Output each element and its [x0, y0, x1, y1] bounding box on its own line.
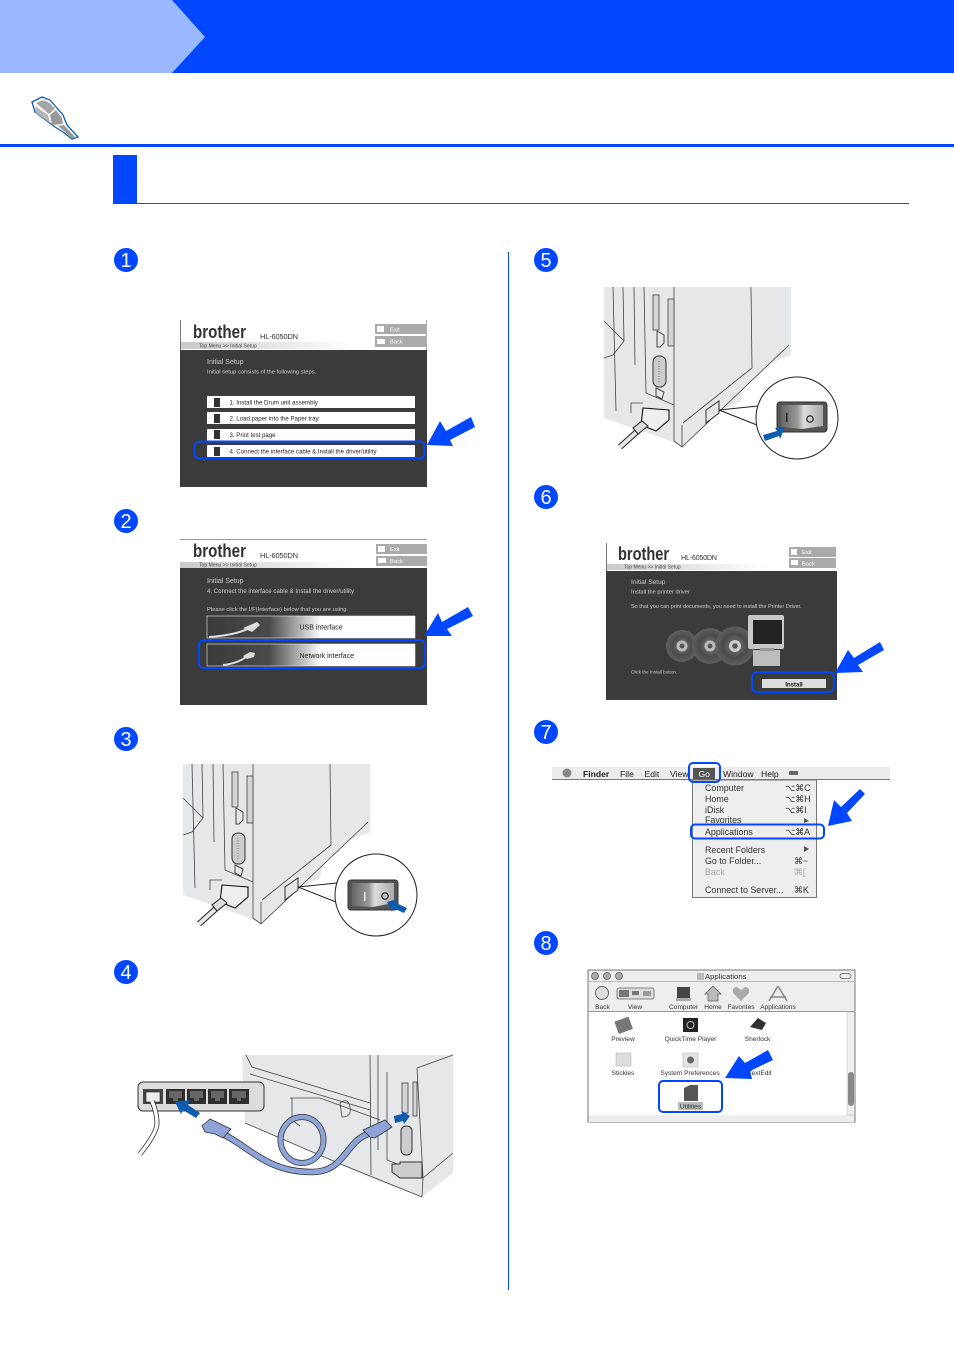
hub input cable	[140, 1101, 157, 1154]
step 7 number: 7	[540, 722, 552, 744]
dropdown menu	[692, 780, 816, 898]
rocker switch	[777, 402, 827, 432]
screenshot: interface selection: Top Menu >> Initial Setup	[199, 562, 257, 568]
step 1 number: 1	[120, 250, 132, 272]
dropdown menu: ⌥⌘A	[785, 827, 810, 837]
step 7 number	[534, 720, 558, 744]
menu bar text	[562, 768, 798, 780]
computer	[748, 615, 784, 666]
switch callout circle	[335, 854, 417, 936]
CD discs	[666, 626, 754, 666]
screenshot: interface selection: Please click the I/F(Interface) below that you are using.	[207, 607, 349, 613]
toolbar: Applications	[760, 1004, 796, 1011]
toolbar	[595, 986, 796, 1011]
file labels	[611, 1036, 772, 1110]
screenshot: install printer driver: Click the Install button.	[631, 670, 677, 674]
illustration: network cable connected to hub and printer	[138, 1055, 453, 1197]
screenshot: interface selection: Exit	[390, 547, 400, 553]
option: Network interface	[207, 644, 415, 666]
screenshot: interface selection: Back	[390, 559, 403, 565]
arrow: step 2	[424, 607, 473, 636]
highlight: install	[752, 672, 834, 692]
dropdown menu: ⌥⌘C	[785, 783, 811, 793]
dropdown menu: ⌥⌘I	[785, 805, 807, 815]
file labels: QuickTime Player	[665, 1036, 717, 1043]
screenshot: initial setup steps: brother	[193, 322, 246, 342]
dropdown menu: ⌘~	[794, 856, 808, 866]
screenshot: install printer driver: Back	[802, 562, 815, 568]
screenshot: install printer driver: Initial Setup	[631, 579, 666, 586]
screenshot: initial setup steps: Exit	[390, 328, 400, 334]
screenshot: install printer driver: HL-6050DN	[681, 553, 717, 562]
menu bar text: Window	[723, 769, 754, 779]
option: USB interface	[207, 616, 415, 638]
install button: Install	[785, 682, 803, 688]
screenshot: install printer driver: brother	[618, 544, 669, 564]
dropdown menu: Go to Folder...	[705, 856, 761, 866]
screenshot: initial setup steps	[180, 320, 427, 487]
dropdown menu: Applications	[705, 827, 753, 837]
hub	[138, 1082, 264, 1111]
network cable	[202, 1117, 392, 1172]
header banner	[0, 0, 954, 73]
menu bar text: Go	[698, 769, 710, 779]
screenshot: Applications window	[588, 970, 855, 1122]
screenshot: install printer driver: Install the printer driver	[631, 590, 690, 596]
screenshot: install printer driver: Exit	[802, 550, 812, 556]
dropdown menu: ⌥⌘H	[785, 794, 811, 804]
toolbar: Back	[595, 1004, 611, 1011]
step 6 number: 6	[540, 487, 552, 509]
step 2 number: 2	[120, 511, 132, 533]
dropdown menu: Back	[705, 867, 725, 877]
step rows: 3. Print test page	[230, 432, 276, 439]
screenshot: initial setup steps: Top Menu >> Initial Setup	[199, 344, 257, 350]
file labels: Stickies	[612, 1070, 635, 1077]
arrow: step 6	[835, 642, 884, 673]
arrow: step 1	[427, 417, 475, 446]
step 3 number	[114, 727, 138, 751]
step rows: 2. Load paper into the Paper tray	[230, 416, 320, 422]
file labels: TextEdit	[748, 1070, 772, 1077]
screenshot: initial setup steps: Initial setup consists of the following steps.	[207, 370, 317, 376]
arrow: press on	[763, 427, 785, 441]
step rows: 1. Install the Drum unit assembly	[230, 400, 319, 406]
screenshot: interface selection: HL-6050DN	[260, 551, 298, 560]
step 8 number: 8	[540, 933, 552, 955]
step 1 number	[114, 248, 138, 272]
step 5 number	[534, 248, 558, 272]
file labels: Utilities	[680, 1104, 702, 1110]
menu bar text: Finder	[583, 769, 610, 779]
dropdown menu: Recent Folders	[705, 845, 766, 855]
highlight: Go	[689, 763, 720, 782]
menu bar text: View	[670, 769, 689, 779]
highlight: Applications	[691, 824, 824, 838]
arrow: hub port	[175, 1100, 200, 1118]
option: Network interface: Network interface	[300, 653, 354, 660]
header tab	[0, 0, 205, 73]
file icons	[614, 1017, 766, 1101]
screenshot: initial setup steps: Initial Setup	[207, 359, 244, 366]
arrow: press off	[387, 899, 407, 913]
toolbar: Home	[704, 1004, 722, 1011]
dropdown menu: Computer	[705, 783, 744, 793]
screenshot: install printer driver	[606, 543, 837, 700]
highlight: Utilities	[659, 1081, 722, 1112]
illustration: printer power switch on	[604, 287, 838, 459]
step 3 number: 3	[120, 729, 132, 751]
scroll bar	[847, 1012, 854, 1115]
screenshot: initial setup steps: HL-6050DN	[260, 332, 298, 341]
dropdown menu: iDisk	[705, 805, 725, 815]
highlight: network row	[199, 640, 425, 668]
switch callout circle	[756, 377, 838, 459]
arrow: printer port	[394, 1111, 410, 1124]
screenshot: interface selection: 4. Connect the interface cable & Install the driver/utility	[207, 588, 355, 595]
install button	[762, 679, 826, 688]
screenshot: interface selection: Initial Setup	[207, 578, 244, 585]
step 4 number: 4	[120, 962, 132, 984]
section heading marker	[113, 155, 909, 204]
toolbar: Computer	[669, 1004, 699, 1011]
header rule	[0, 144, 954, 147]
file labels: System Preferences	[660, 1070, 720, 1077]
section rule	[137, 203, 909, 204]
dropdown menu: Home	[705, 794, 729, 804]
menu bar text: Help	[761, 769, 779, 779]
column divider	[508, 252, 509, 1290]
toolbar: View	[628, 1004, 642, 1011]
screenshot: interface selection	[180, 539, 427, 705]
step 8 number	[534, 931, 558, 955]
toolbar: Favorites	[727, 1004, 755, 1011]
screenshot: Mac Go menu	[552, 763, 890, 898]
file labels: Preview	[611, 1036, 635, 1043]
dropdown menu: Connect to Server...	[705, 885, 783, 895]
step rows	[207, 396, 415, 457]
screenshot: install printer driver: So that you can print documents, you need to install the Printer Driver.	[631, 604, 802, 610]
illustration: printer power switch off	[183, 764, 417, 936]
step 6 number	[534, 485, 558, 509]
screenshot: initial setup steps: Back	[390, 340, 403, 346]
screenshot: interface selection: brother	[193, 541, 246, 561]
file labels: Sherlock	[745, 1036, 771, 1043]
menu bar text: File	[620, 769, 634, 779]
dropdown menu: ⌘K	[794, 885, 809, 895]
step 2 number	[114, 509, 138, 533]
step 5 number: 5	[540, 250, 552, 272]
screenshot: install printer driver: Top Menu >> Initial Setup	[624, 564, 681, 570]
dropdown menu: Favorites	[705, 815, 742, 825]
step rows: 4. Connect the interface cable & Install the driver/utility	[230, 448, 377, 456]
screenshot: Applications window: Applications	[705, 972, 747, 981]
arrow: step 7	[828, 789, 865, 826]
dropdown menu: ⌘[	[794, 867, 806, 877]
rocker switch	[348, 880, 398, 910]
icon: network connector	[32, 97, 78, 139]
highlight: row 4	[194, 442, 424, 458]
arrow: step 8	[725, 1050, 773, 1079]
menu bar text: Edit	[644, 769, 660, 779]
step 4 number	[114, 960, 138, 984]
option: USB interface: USB interface	[300, 624, 343, 632]
